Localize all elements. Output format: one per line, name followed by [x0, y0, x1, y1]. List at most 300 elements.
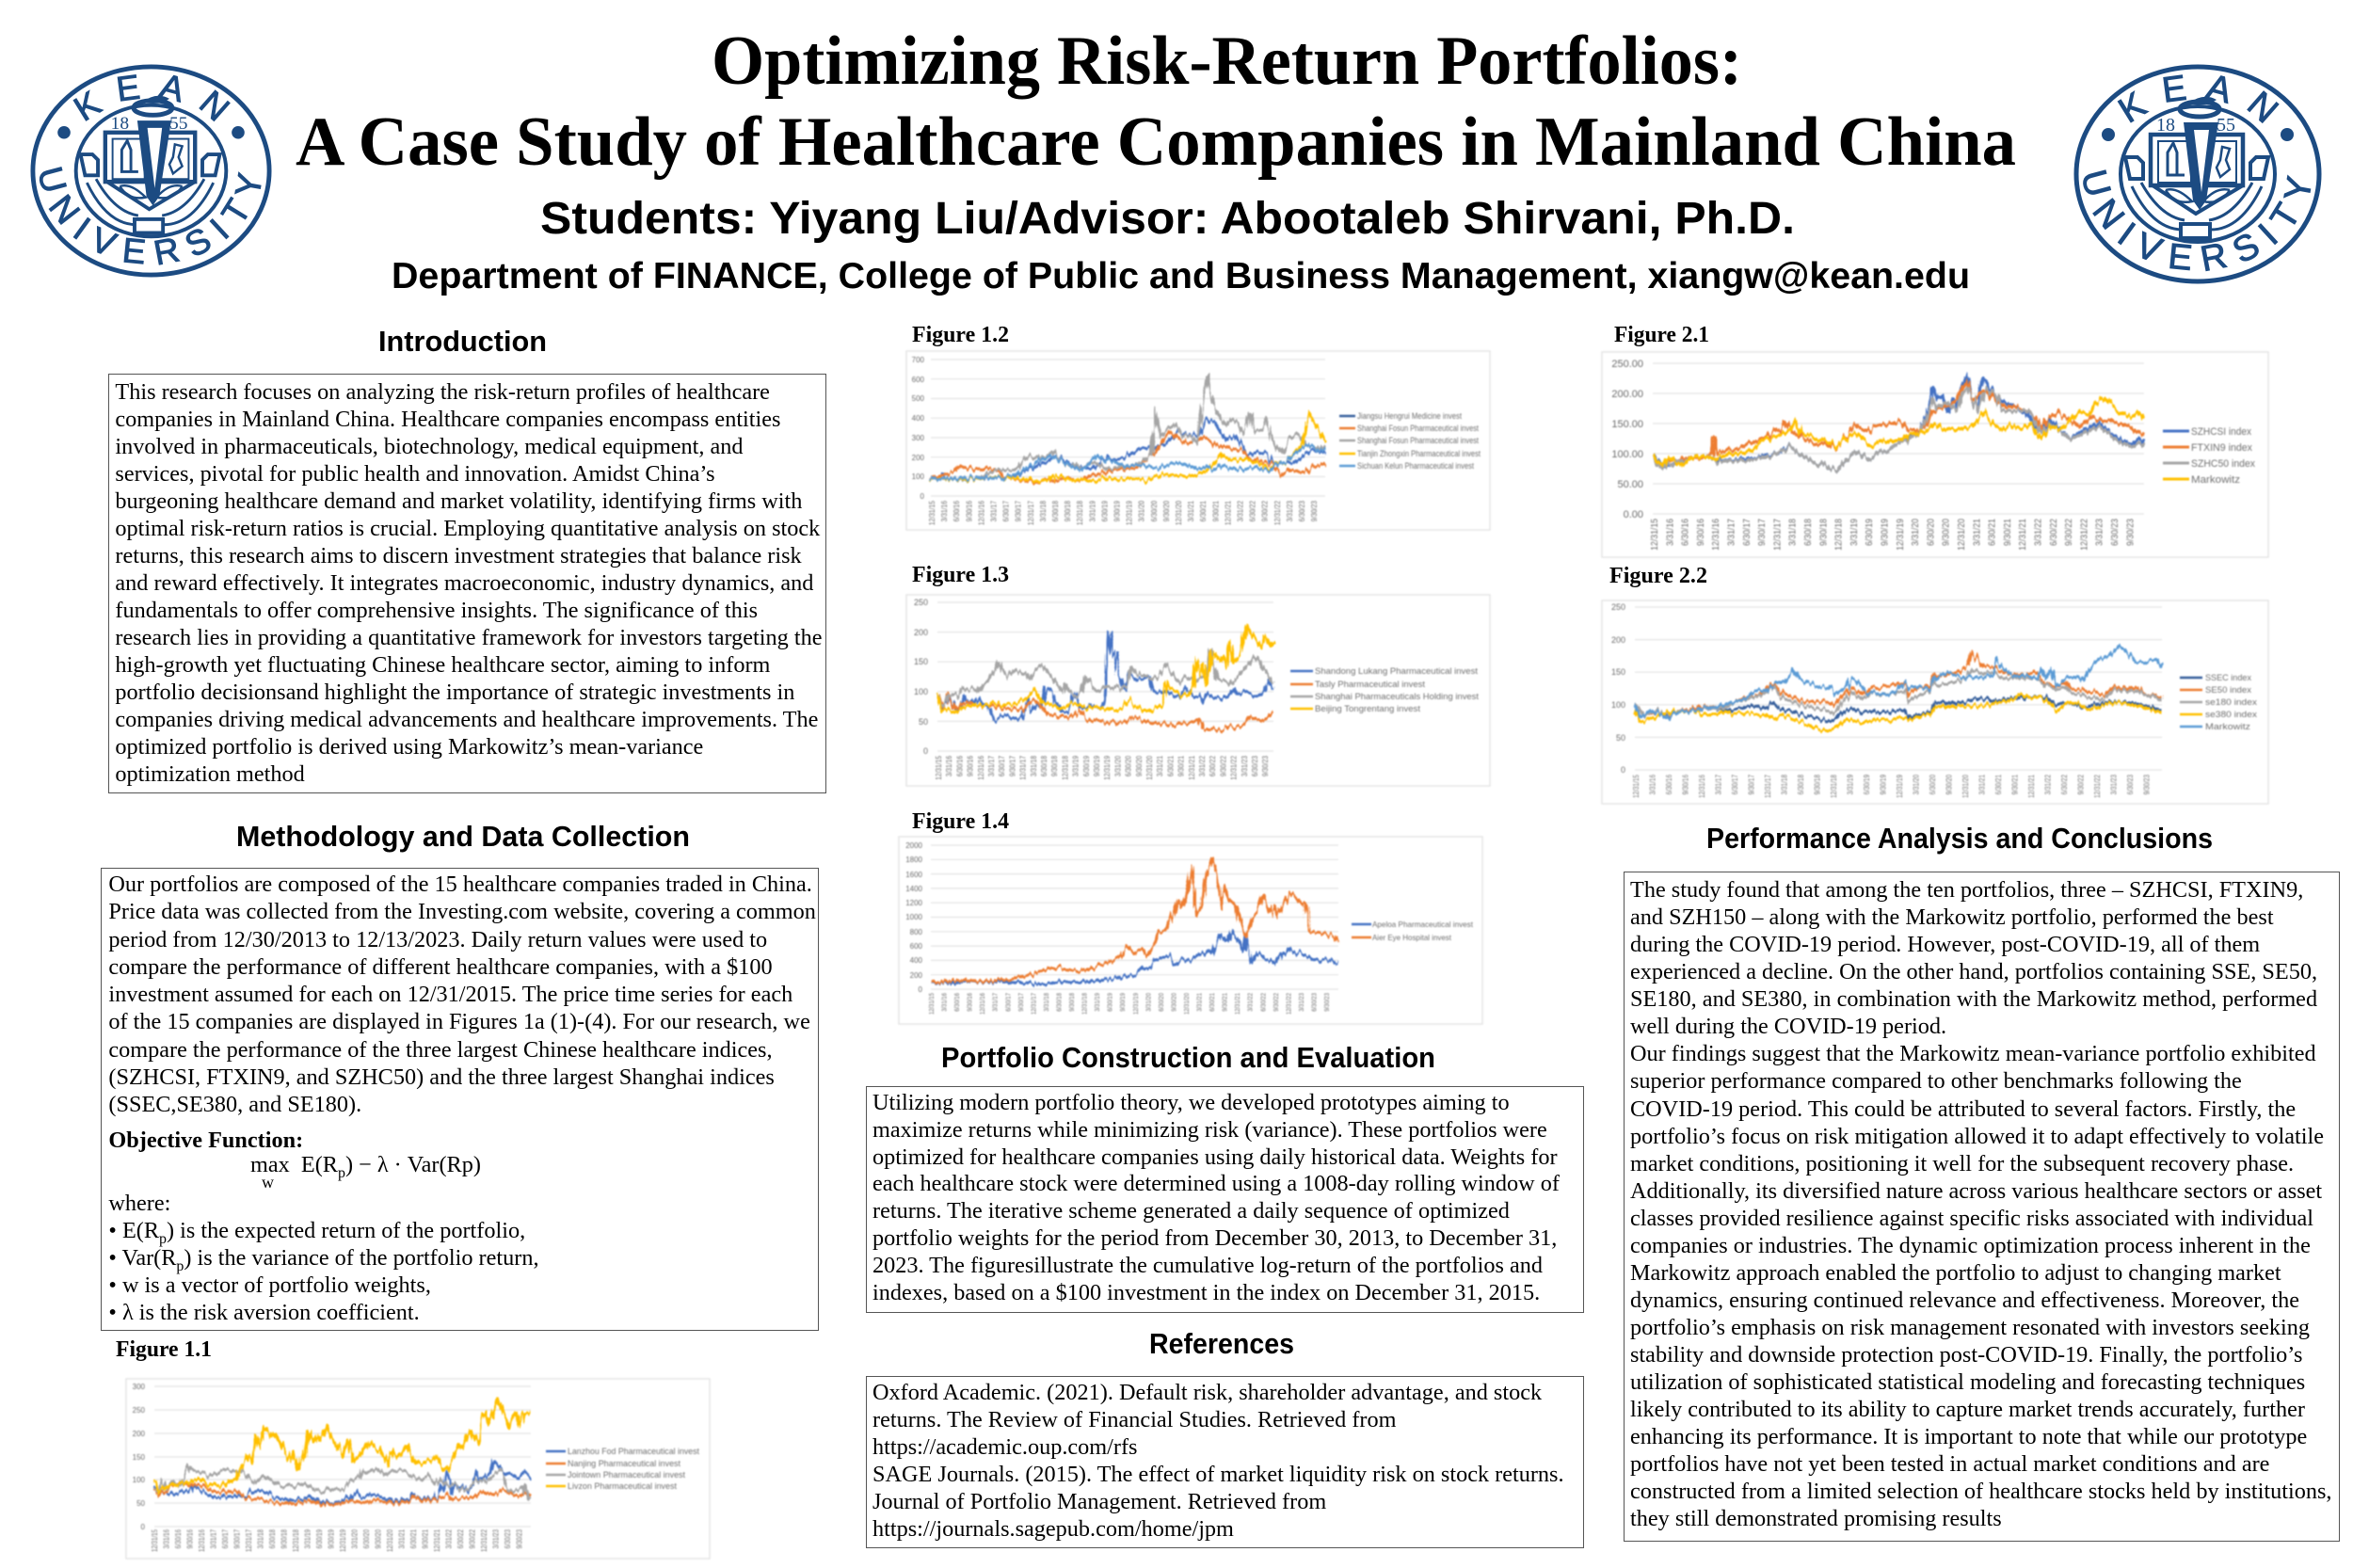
x axis date labels: 9/30/23 — [516, 1529, 524, 1549]
legend: Jointown Pharmaceutical invest — [568, 1470, 685, 1480]
panel: references text: Journal of Portfolio Management. Retrieved from — [872, 1489, 1326, 1514]
x axis date labels: 12/31/17 — [1031, 993, 1038, 1015]
x axis date labels: 3/31/18 — [1780, 775, 1789, 794]
panel: performance analysis and conclusions text: portfolio’s emphasis on risk management resonated with investors seeking — [1630, 1315, 2310, 1340]
chart: Figure 1.4 line chart: 1200 — [905, 899, 923, 907]
panel: portfolio construction text: portfolio weights for the period from December 30, 2013, to December 31, — [872, 1225, 1557, 1251]
x axis date labels: 9/30/20 — [1941, 519, 1952, 546]
panel: portfolio construction text: returns. The iterative scheme generated a daily sequence of optimized — [872, 1198, 1510, 1224]
x axis date labels: 9/30/23 — [1324, 993, 1331, 1012]
x axis date labels: 12/31/17 — [1026, 501, 1035, 525]
panel: introduction text: involved in pharmaceuticals, biotechnology, medical equipment, and — [115, 434, 744, 459]
panel: performance analysis and conclusions text: COVID-19 period. This could be attributed to several factors. Firstly, the — [1630, 1096, 2296, 1122]
panel: methodology text: compare the performance of the three largest Chinese healthcare indices, — [108, 1037, 773, 1063]
panel: performance analysis and conclusions text: classes provided resilience against specific risks associated with individual — [1630, 1206, 2313, 1231]
x axis date labels: 3/31/16 — [940, 501, 949, 521]
department line: Department of FINANCE, College of Public and Business Management, xiangw@kean.edu — [392, 256, 1970, 296]
panel: references text: https://academic.oup.com/rfs — [872, 1434, 1137, 1460]
x axis date labels: 12/31/15 — [934, 756, 943, 780]
chart: Figure 2.2 line chart: 250 — [1611, 602, 1625, 612]
x axis date labels: 12/31/19 — [1132, 993, 1140, 1015]
panel: introduction text: optimized portfolio is derived using Markowitz’s mean-variance — [115, 734, 703, 760]
panel: methodology text: • w is a vector of portfolio weights, — [108, 1272, 431, 1298]
logo: Kean University seal (right): 18 — [2156, 115, 2175, 136]
x axis date labels: 3/31/18 — [1029, 756, 1038, 776]
x axis date labels: 6/30/21 — [1209, 993, 1216, 1012]
chart: Figure 2.2 line chart: 150 — [1611, 667, 1625, 677]
x axis date labels: 9/30/18 — [1049, 756, 1059, 776]
panel: performance analysis and conclusions text: stability and downside protection post-COVID-19. Finally, the portfolio’s — [1630, 1342, 2302, 1368]
x axis date labels: 3/31/22 — [2043, 775, 2053, 794]
panel: performance analysis and conclusions text: they still demonstrated promising results — [1630, 1506, 2002, 1531]
chart: Figure 2.2 line chart: 200 — [1611, 635, 1625, 645]
x axis date labels: 12/31/15 — [928, 993, 936, 1015]
chart: Figure 2.1 line chart: 50.00 — [1617, 479, 1643, 490]
panel: performance analysis and conclusions text: well during the COVID-19 period. — [1630, 1014, 1946, 1039]
x axis date labels: 6/30/17 — [1001, 501, 1011, 521]
x axis date labels: 12/31/19 — [1895, 775, 1904, 798]
x axis date labels: 9/30/19 — [1120, 993, 1127, 1012]
logo: Kean University seal (right): KEAN — [2118, 74, 2280, 124]
logo: Kean University seal (left): 18 — [111, 114, 129, 134]
x axis date labels: 12/31/16 — [198, 1529, 206, 1552]
x axis date labels: 6/30/21 — [1166, 756, 1176, 776]
x axis date labels: 6/30/22 — [2048, 519, 2059, 546]
x axis date labels: 6/30/16 — [954, 993, 961, 1012]
x axis date labels: 12/31/18 — [1061, 756, 1070, 780]
x axis date labels: 12/31/19 — [1895, 519, 1906, 551]
x axis date labels: 9/30/18 — [280, 1529, 289, 1549]
legend: SE50 index — [2205, 685, 2251, 696]
x axis date labels: 9/30/22 — [2076, 775, 2086, 794]
figure label: Figure 1.1: Figure 1.1 — [116, 1337, 212, 1362]
x axis date labels: 12/31/21 — [2017, 519, 2028, 551]
authors line: Students: Yiyang Liu/Advisor: Abootaleb Shirvani, Ph.D. — [540, 194, 1795, 244]
chart: Figure 2.2 line chart: 0 — [1621, 765, 1625, 775]
x axis date labels: 3/31/18 — [257, 1529, 265, 1549]
chart: Figure 1.1 line chart — [125, 1378, 711, 1560]
panel: introduction text: services, pivotal for public health and innovation. Amidst China’s — [115, 461, 715, 487]
x axis date labels: 6/30/16 — [1664, 775, 1673, 794]
panel: portfolio construction text — [866, 1086, 1584, 1313]
chart: Figure 2.1 line chart — [1601, 351, 2269, 558]
x axis date labels: 12/31/18 — [292, 1529, 300, 1552]
panel: references text: SAGE Journals. (2015). The effect of market liquidity risk on stock returns. — [872, 1462, 1564, 1487]
x axis date labels: 6/30/21 — [409, 1529, 418, 1549]
x axis date labels: 9/30/16 — [186, 1529, 195, 1549]
legend: SSEC index — [2205, 673, 2251, 683]
x axis date labels: 3/31/17 — [992, 993, 1000, 1012]
chart: Figure 1.4 line chart: 400 — [910, 956, 923, 965]
x axis date labels: 6/30/22 — [456, 1529, 465, 1549]
x axis date labels: 3/31/19 — [1088, 501, 1096, 521]
chart: Figure 1.4 line chart: 1600 — [905, 871, 923, 879]
heading: Introduction: Introduction — [378, 325, 547, 358]
x axis date labels: 6/30/17 — [1741, 519, 1753, 546]
x axis date labels: 9/30/19 — [328, 1529, 336, 1549]
x axis date labels: 3/31/22 — [2033, 519, 2044, 546]
x axis date labels: 3/31/20 — [1912, 775, 1921, 794]
x axis date labels: 9/30/22 — [1219, 756, 1228, 776]
legend: Aier Eye Hospital invest — [1372, 933, 1452, 942]
data series — [937, 626, 1273, 730]
x axis date labels: 12/31/22 — [2079, 519, 2090, 551]
legend: SZHCSI index — [2191, 426, 2251, 438]
x axis date labels: 9/30/21 — [2002, 519, 2013, 546]
chart: Figure 1.2 line chart: 600 — [912, 376, 925, 384]
logo: Kean University seal (left) — [30, 64, 271, 277]
panel: introduction text: companies in Mainland China. Healthcare companies encompass entities — [115, 407, 780, 432]
chart: Figure 1.3 line chart: 250 — [914, 598, 928, 607]
x axis date labels: 6/30/16 — [952, 501, 961, 521]
x axis date labels: 3/31/17 — [989, 501, 999, 521]
data series — [931, 376, 1325, 482]
x axis date labels: 9/30/20 — [1171, 993, 1178, 1012]
x axis date labels: 9/30/23 — [2125, 519, 2137, 546]
x axis date labels: 12/31/17 — [245, 1529, 253, 1552]
x axis date labels: 9/30/21 — [1176, 756, 1186, 776]
chart: Figure 1.2 line chart: 700 — [912, 356, 925, 364]
x axis date labels: 6/30/20 — [1928, 775, 1937, 794]
x axis date labels: 9/30/19 — [1112, 501, 1122, 521]
x axis date labels: 3/31/22 — [1197, 756, 1207, 776]
x axis date labels: 6/30/19 — [1107, 993, 1114, 1012]
x axis date labels: 6/30/23 — [504, 1529, 512, 1549]
x axis date labels: 12/31/17 — [1018, 756, 1028, 780]
x axis date labels: 9/30/17 — [1017, 993, 1025, 1012]
x axis date labels: 12/31/15 — [927, 501, 936, 525]
legend — [1290, 666, 1479, 714]
chart: Figure 2.1 line chart: 150.00 — [1611, 419, 1643, 430]
x axis date labels: 6/30/23 — [1311, 993, 1319, 1012]
figure label: Figure 2.1: Figure 2.1 — [1614, 323, 1709, 347]
x axis date labels: 12/31/16 — [1697, 775, 1706, 798]
panel: introduction text: returns, this research aims to discern investment strategies that balance risk — [115, 543, 802, 568]
title: Optimizing Risk-Return Portfolios: — [712, 23, 1742, 100]
panel: references text: returns. The Review of Financial Studies. Retrieved from — [872, 1407, 1397, 1432]
x axis date labels: 9/30/18 — [1069, 993, 1076, 1012]
x axis date labels: 6/30/21 — [1199, 501, 1208, 521]
panel: performance analysis and conclusions text: market conditions, positioning it well for the subsequent recovery phase. — [1630, 1151, 2294, 1176]
x axis date labels — [1649, 519, 2137, 551]
x axis date labels: 12/31/20 — [1183, 993, 1191, 1015]
legend: Jiangsu Hengrui Medicine invest — [1357, 411, 1462, 421]
panel: portfolio construction text: Utilizing modern portfolio theory, we developed prototypes aiming to — [872, 1090, 1510, 1115]
chart: Figure 1.3 line chart — [905, 594, 1491, 787]
panel: performance analysis and conclusions text: Markowitz approach enabled the portfolio to adjust to changing market — [1630, 1260, 2281, 1286]
x axis date labels: 3/31/23 — [2109, 775, 2119, 794]
panel: methodology text: (SZHCSI, FTXIN9, and SZHC50) and the three largest Shanghai indices — [108, 1064, 775, 1090]
panel: introduction text: optimal risk-return ratios is crucial. Employing quantitative analysis on stock — [115, 516, 820, 541]
panel: performance analysis and conclusions text: dynamics, ensuring continued relevance and effectiveness. Moreover, the — [1630, 1288, 2299, 1313]
panel: performance analysis and conclusions text: likely contributed to its ability to capture market trends accurately, further — [1630, 1397, 2305, 1422]
figure label: Figure 2.2: Figure 2.2 — [1609, 564, 1707, 588]
x axis date labels — [928, 993, 1331, 1015]
panel: methodology text: Price data was collected from the Investing.com website, covering a common — [108, 899, 816, 924]
x axis date labels: 9/30/18 — [1064, 501, 1072, 521]
x axis date labels: 9/30/17 — [1756, 519, 1768, 546]
x axis date labels: 9/30/16 — [1695, 519, 1706, 546]
chart: Figure 1.2 line chart: 200 — [912, 454, 925, 462]
x axis date labels: 3/31/21 — [1155, 756, 1164, 776]
x axis date labels: 9/30/20 — [375, 1529, 383, 1549]
chart: Figure 1.4 line chart: 800 — [910, 928, 923, 936]
x axis date labels: 9/30/23 — [2142, 775, 2152, 794]
chart: Figure 2.2 line chart: 50 — [1616, 733, 1625, 743]
legend: se180 index — [2205, 697, 2257, 708]
x axis date labels: 12/31/21 — [2026, 775, 2036, 798]
chart: Figure 2.2 line chart — [1601, 600, 2269, 805]
figure label: Figure 1.3: Figure 1.3 — [912, 563, 1009, 587]
x axis date labels: 3/31/21 — [1196, 993, 1204, 1012]
panel: references text: Oxford Academic. (2021). Default risk, shareholder advantage, and stock — [872, 1380, 1542, 1404]
x axis date labels: 6/30/18 — [268, 1529, 277, 1549]
x axis date labels: 12/31/16 — [977, 501, 986, 525]
x axis date labels: 9/30/16 — [1681, 775, 1690, 794]
x axis date labels: 9/30/16 — [967, 993, 974, 1012]
x axis date labels: 12/31/20 — [1144, 756, 1154, 780]
panel: introduction text: high-growth yet fluctuating Chinese healthcare sector, aiming to inform — [115, 652, 770, 678]
x axis date labels: 6/30/17 — [997, 756, 1006, 776]
x axis date labels: 3/31/16 — [941, 993, 949, 1012]
panel: introduction text: This research focuses on analyzing the risk-return profiles of healthcare — [115, 379, 770, 405]
x axis date labels: 12/31/17 — [1763, 775, 1772, 798]
x axis date labels: 3/31/20 — [1145, 993, 1153, 1012]
x axis date labels: 12/31/19 — [1102, 756, 1112, 780]
x axis date labels: 6/30/23 — [1250, 756, 1259, 776]
chart: Figure 1.1 line chart: 200 — [133, 1430, 146, 1438]
x axis date labels: 3/31/20 — [351, 1529, 360, 1549]
heading: Methodology and Data Collection: Methodology and Data Collection — [236, 820, 690, 853]
x axis date labels: 3/31/17 — [210, 1529, 218, 1549]
legend: Shandong Lukang Pharmaceutical invest — [1315, 666, 1478, 677]
legend: Nanjing Pharmaceutical invest — [568, 1459, 680, 1469]
panel: methodology text: of the 15 companies are displayed in Figures 1a (1)-(4). For our research, we — [108, 1009, 810, 1034]
x axis date labels: 9/30/18 — [1818, 519, 1830, 546]
x axis date labels: 9/30/20 — [1161, 501, 1171, 521]
x axis date labels: 9/30/17 — [1014, 501, 1023, 521]
x axis date labels: 3/31/23 — [2094, 519, 2105, 546]
legend: Tasly Pharmaceutical invest — [1315, 680, 1425, 690]
x axis date labels: 3/31/21 — [1187, 501, 1195, 521]
panel: performance analysis and conclusions text: The study found that among the ten portfolios, three – SZHCSI, FTXIN9, — [1630, 877, 2303, 903]
data series — [1635, 647, 2162, 730]
chart: Figure 1.4 line chart: 0 — [919, 985, 923, 994]
panel: portfolio construction text: each healthcare stock were determined using a 1008-day rolling window of — [872, 1171, 1560, 1196]
x axis date labels — [934, 756, 1270, 780]
panel: introduction text: and reward effectively. It integrates macroeconomic, industry dynamics, and — [115, 570, 813, 596]
x axis date labels: 9/30/23 — [1310, 501, 1319, 521]
x axis date labels: 12/31/20 — [386, 1529, 394, 1552]
x axis date labels: 12/31/22 — [1286, 993, 1293, 1015]
panel: introduction text — [108, 374, 826, 793]
x axis date labels: 3/31/16 — [163, 1529, 171, 1549]
chart: Figure 1.4 line chart: 1400 — [905, 885, 923, 893]
legend: Lanzhou Fod Pharmaceutical invest — [568, 1447, 699, 1457]
chart: Figure 2.2 line chart: 100 — [1611, 700, 1625, 710]
chart: Figure 1.4 line chart: 2000 — [905, 841, 923, 850]
panel: methodology text: max E(Rp) − λ · Var(Rp) — [250, 1152, 481, 1181]
chart: Figure 2.1 line chart: 100.00 — [1611, 449, 1643, 460]
x axis date labels: 6/30/17 — [221, 1529, 230, 1549]
x axis date labels: 12/31/15 — [1649, 519, 1660, 551]
panel: methodology text: • E(Rp) is the expected return of the portfolio, — [108, 1218, 525, 1247]
x axis date labels: 3/31/16 — [1665, 519, 1676, 546]
panel: performance analysis and conclusions text: companies or industries. The dynamic optimization process inherent in the — [1630, 1233, 2311, 1258]
x axis date labels: 6/30/19 — [1100, 501, 1110, 521]
chart: Figure 1.2 line chart: 100 — [912, 472, 925, 481]
panel: references text: https://journals.sagepub.com/home/jpm — [872, 1516, 1234, 1542]
data series — [1653, 375, 2144, 471]
legend — [2163, 426, 2255, 486]
chart: Figure 1.1 line chart: 50 — [136, 1499, 146, 1508]
x axis date labels: 6/30/18 — [1050, 501, 1060, 521]
chart: Figure 1.1 line chart: 300 — [133, 1383, 146, 1391]
x axis date labels: 3/31/17 — [1726, 519, 1737, 546]
x axis date labels: 9/30/16 — [966, 756, 975, 776]
panel: methodology text: where: — [108, 1191, 170, 1216]
x axis date labels: 6/30/18 — [1056, 993, 1064, 1012]
x axis date labels: 12/31/15 — [151, 1529, 159, 1552]
legend: Markowitz — [2205, 722, 2250, 732]
x axis date labels — [927, 501, 1319, 525]
x axis date labels: 12/31/22 — [1273, 501, 1282, 525]
chart: Figure 1.4 line chart: 200 — [910, 971, 923, 980]
x axis date labels: 9/30/21 — [1211, 501, 1220, 521]
chart: Figure 1.4 line chart — [898, 836, 1483, 1025]
x axis date labels: 6/30/20 — [1149, 501, 1159, 521]
panel: methodology text: Our portfolios are composed of the 15 healthcare companies traded in China. — [108, 872, 812, 897]
x axis date labels: 12/31/18 — [1081, 993, 1089, 1015]
panel: introduction text: burgeoning healthcare demand and market volatility, identifying firms with — [115, 488, 802, 514]
x axis date labels: 3/31/23 — [1298, 993, 1305, 1012]
x axis date labels: 12/31/20 — [1956, 519, 1967, 551]
panel: performance analysis and conclusions text: utilization of sophisticated statistical modeling and forecasting techniques — [1630, 1369, 2305, 1395]
x axis date labels — [151, 1529, 524, 1552]
x axis date labels: 9/30/19 — [1880, 519, 1891, 546]
panel: introduction text: research lies in providing a quantitative framework for investors targeting the — [115, 625, 822, 650]
x axis date labels: 3/31/20 — [1113, 756, 1123, 776]
x axis date labels: 6/30/22 — [2059, 775, 2069, 794]
x axis date labels: 9/30/17 — [233, 1529, 242, 1549]
x axis date labels: 9/30/21 — [422, 1529, 430, 1549]
x axis date labels: 6/30/20 — [362, 1529, 371, 1549]
x axis date labels: 12/31/21 — [1224, 501, 1233, 525]
x axis date labels: 12/31/16 — [1710, 519, 1721, 551]
x axis date labels: 6/30/23 — [1297, 501, 1306, 521]
chart: Figure 1.2 line chart: 400 — [912, 414, 925, 423]
x axis date labels: 12/31/19 — [1125, 501, 1134, 525]
x axis date labels: 6/30/22 — [1260, 993, 1268, 1012]
panel: performance analysis and conclusions text: Our findings suggest that the Markowitz mean-variance portfolio exhibited — [1630, 1041, 2316, 1066]
x axis date labels: 3/31/22 — [1236, 501, 1245, 521]
data series — [154, 1400, 531, 1505]
x axis date labels: 12/31/22 — [1229, 756, 1239, 780]
data series — [931, 859, 1338, 984]
chart: Figure 1.2 line chart: 300 — [912, 434, 925, 442]
logo: Kean University seal (right) — [2074, 64, 2321, 284]
x axis date labels: 9/30/22 — [2063, 519, 2074, 546]
x axis date labels: 6/30/18 — [1802, 519, 1814, 546]
x axis date labels: 12/31/17 — [1772, 519, 1784, 551]
legend — [1339, 411, 1481, 471]
panel: introduction text: fundamentals to offer comprehensive insights. The significance of this — [115, 598, 758, 623]
chart: Figure 1.2 line chart: 0 — [920, 492, 925, 501]
x axis date labels: 6/30/23 — [2125, 775, 2135, 794]
x axis date labels: 3/31/19 — [1071, 756, 1080, 776]
x axis date labels: 6/30/19 — [1862, 775, 1871, 794]
legend: Markowitz — [2191, 474, 2240, 486]
legend: Beijing Tongrentang invest — [1315, 704, 1420, 714]
chart: Figure 1.4 line chart: 600 — [910, 942, 923, 951]
chart: Figure 1.1 line chart: 150 — [133, 1453, 146, 1462]
chart: Figure 1.3 line chart: 100 — [914, 687, 928, 696]
x axis date labels: 3/31/18 — [1787, 519, 1799, 546]
x axis date labels: 9/30/17 — [1008, 756, 1017, 776]
x axis date labels: 3/31/18 — [1038, 501, 1048, 521]
legend — [546, 1447, 699, 1492]
x axis date labels: 6/30/18 — [1796, 775, 1805, 794]
panel: methodology text: • Var(Rp) is the variance of the portfolio return, — [108, 1245, 539, 1274]
logo: Kean University seal (right): 55 — [2217, 115, 2235, 136]
title — [296, 23, 2016, 181]
x axis date labels: 6/30/19 — [1081, 756, 1091, 776]
x axis date labels: 6/30/20 — [1926, 519, 1937, 546]
panel: performance analysis and conclusions text: portfolio’s focus on risk mitigation allowed it to adapt effectively to volatile — [1630, 1124, 2324, 1149]
panel: methodology text: w — [262, 1173, 274, 1192]
x axis date labels: 9/30/17 — [1747, 775, 1756, 794]
x axis date labels: 9/30/21 — [2010, 775, 2020, 794]
panel: introduction text: optimization method — [115, 761, 305, 787]
title: A Case Study of Healthcare Companies in Mainland China — [296, 104, 2016, 181]
legend: Apeloa Pharmaceutical invest — [1372, 920, 1474, 929]
x axis date labels: 6/30/18 — [1039, 756, 1048, 776]
legend — [2180, 673, 2257, 732]
x axis date labels: 3/31/19 — [1846, 775, 1855, 794]
panel: portfolio construction text: maximize returns while minimizing risk (variance). These portfolios were — [872, 1117, 1547, 1143]
x axis date labels: 6/30/23 — [2109, 519, 2121, 546]
logo: Kean University seal (left): KEAN — [73, 74, 231, 122]
x axis date labels: 3/31/21 — [1972, 519, 1983, 546]
x axis date labels: 12/31/21 — [1187, 756, 1196, 780]
panel: methodology text — [101, 868, 819, 1331]
chart: Figure 1.1 line chart: 100 — [133, 1476, 146, 1484]
panel: methodology text: (SSEC,SE380, and SE180). — [108, 1092, 361, 1117]
panel: portfolio construction text: indexes, based on a $100 investment in the index on December 31, 2015. — [872, 1280, 1540, 1305]
legend: Shanghai Pharmaceuticals Holding invest — [1315, 692, 1479, 702]
panel: performance analysis and conclusions text: during the COVID-19 period. However, post-COVID-19, all of them — [1630, 932, 2260, 957]
x axis date labels: 6/30/20 — [1158, 993, 1165, 1012]
x axis date labels: 12/31/16 — [976, 756, 985, 780]
x axis date labels: 12/31/19 — [339, 1529, 347, 1552]
x axis date labels: 9/30/21 — [1222, 993, 1229, 1012]
x axis date labels: 3/31/21 — [398, 1529, 407, 1549]
chart: Figure 1.2 line chart: 500 — [912, 394, 925, 403]
x axis date labels: 3/31/19 — [304, 1529, 312, 1549]
logo: Kean University seal (left): UNIVERSITY — [40, 167, 262, 265]
x axis date labels: 3/31/18 — [1043, 993, 1050, 1012]
logo: Kean University seal (left): 55 — [169, 114, 187, 134]
x axis date labels: 3/31/16 — [944, 756, 953, 776]
legend: SZHC50 index — [2191, 458, 2255, 470]
x axis date labels — [1631, 775, 2152, 798]
chart: Figure 1.1 line chart: 0 — [141, 1523, 146, 1531]
x axis date labels: 3/31/23 — [1240, 756, 1249, 776]
chart: Figure 1.4 line chart: 1800 — [905, 856, 923, 864]
legend: FTXIN9 index — [2191, 442, 2252, 454]
x axis date labels: 9/30/19 — [1879, 775, 1888, 794]
x axis date labels: 12/31/20 — [1961, 775, 1970, 798]
